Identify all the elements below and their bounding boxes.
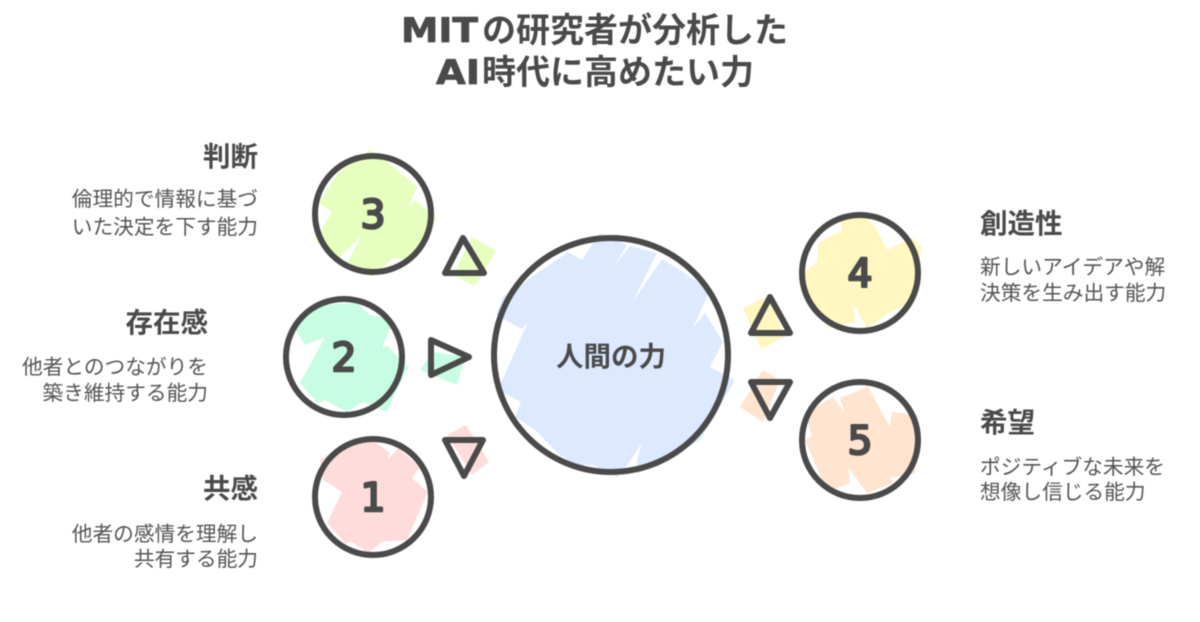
node 5: 希望: [802, 382, 918, 498]
node 1: 共感: 1: [361, 476, 385, 521]
label: 共感: 共有する能力: [134, 548, 258, 571]
arrow: 5 from center: [740, 370, 790, 422]
node 3: 判断: 3: [361, 193, 385, 238]
label: 判断: 倫理的で情報に基づ: [72, 188, 258, 211]
label: 創造性: [980, 208, 1166, 305]
arrow: 1 to center: [445, 425, 489, 476]
node 2: 存在感: 2: [332, 336, 356, 381]
node 5: 希望: 5: [848, 419, 872, 464]
node 4: 創造性: 4: [848, 252, 872, 297]
label: 存在感: 他者とのつながりを: [22, 356, 208, 379]
label: 希望: 希望: [980, 407, 1035, 438]
central circle: 人間の力: [494, 233, 735, 477]
title: [401, 11, 788, 93]
label: 希望: ポジティブな未来を: [980, 455, 1165, 479]
label: 共感: [72, 473, 258, 571]
label: 共感: 他者の感情を理解し: [72, 523, 258, 546]
label: 創造性: 創造性: [980, 208, 1062, 239]
title: 時代に高めたい力: [482, 54, 754, 92]
title: MIT: [401, 11, 479, 51]
label: 存在感: 築き維持する能力: [42, 382, 208, 405]
label: 判断: いた決定を下す能力: [72, 216, 258, 239]
label: 判断: [72, 141, 258, 239]
label: 希望: [980, 407, 1165, 504]
arrow: 3 to center: [445, 237, 496, 286]
title: の研究者が分析した: [482, 11, 788, 50]
label: 創造性: 決策を生み出す能力: [980, 282, 1166, 305]
label: 存在感: 存在感: [126, 307, 208, 338]
label: 希望: 想像し信じる能力: [980, 481, 1146, 504]
node 3: 判断: [315, 150, 437, 277]
node 2: 存在感: [286, 299, 408, 415]
arrow: 4 from center: [743, 296, 790, 349]
node 1: 共感: [315, 438, 431, 555]
label: 共感: 共感: [203, 473, 258, 504]
label: 存在感: [22, 307, 208, 405]
label: 判断: 判断: [203, 141, 258, 172]
arrow: 2 to center: [420, 340, 469, 385]
title: AI: [436, 53, 480, 93]
node 4: 創造性: [798, 212, 922, 331]
label: 創造性: 新しいアイデアや解: [980, 256, 1165, 279]
central circle: 人間の力: 人間の力: [556, 341, 666, 372]
